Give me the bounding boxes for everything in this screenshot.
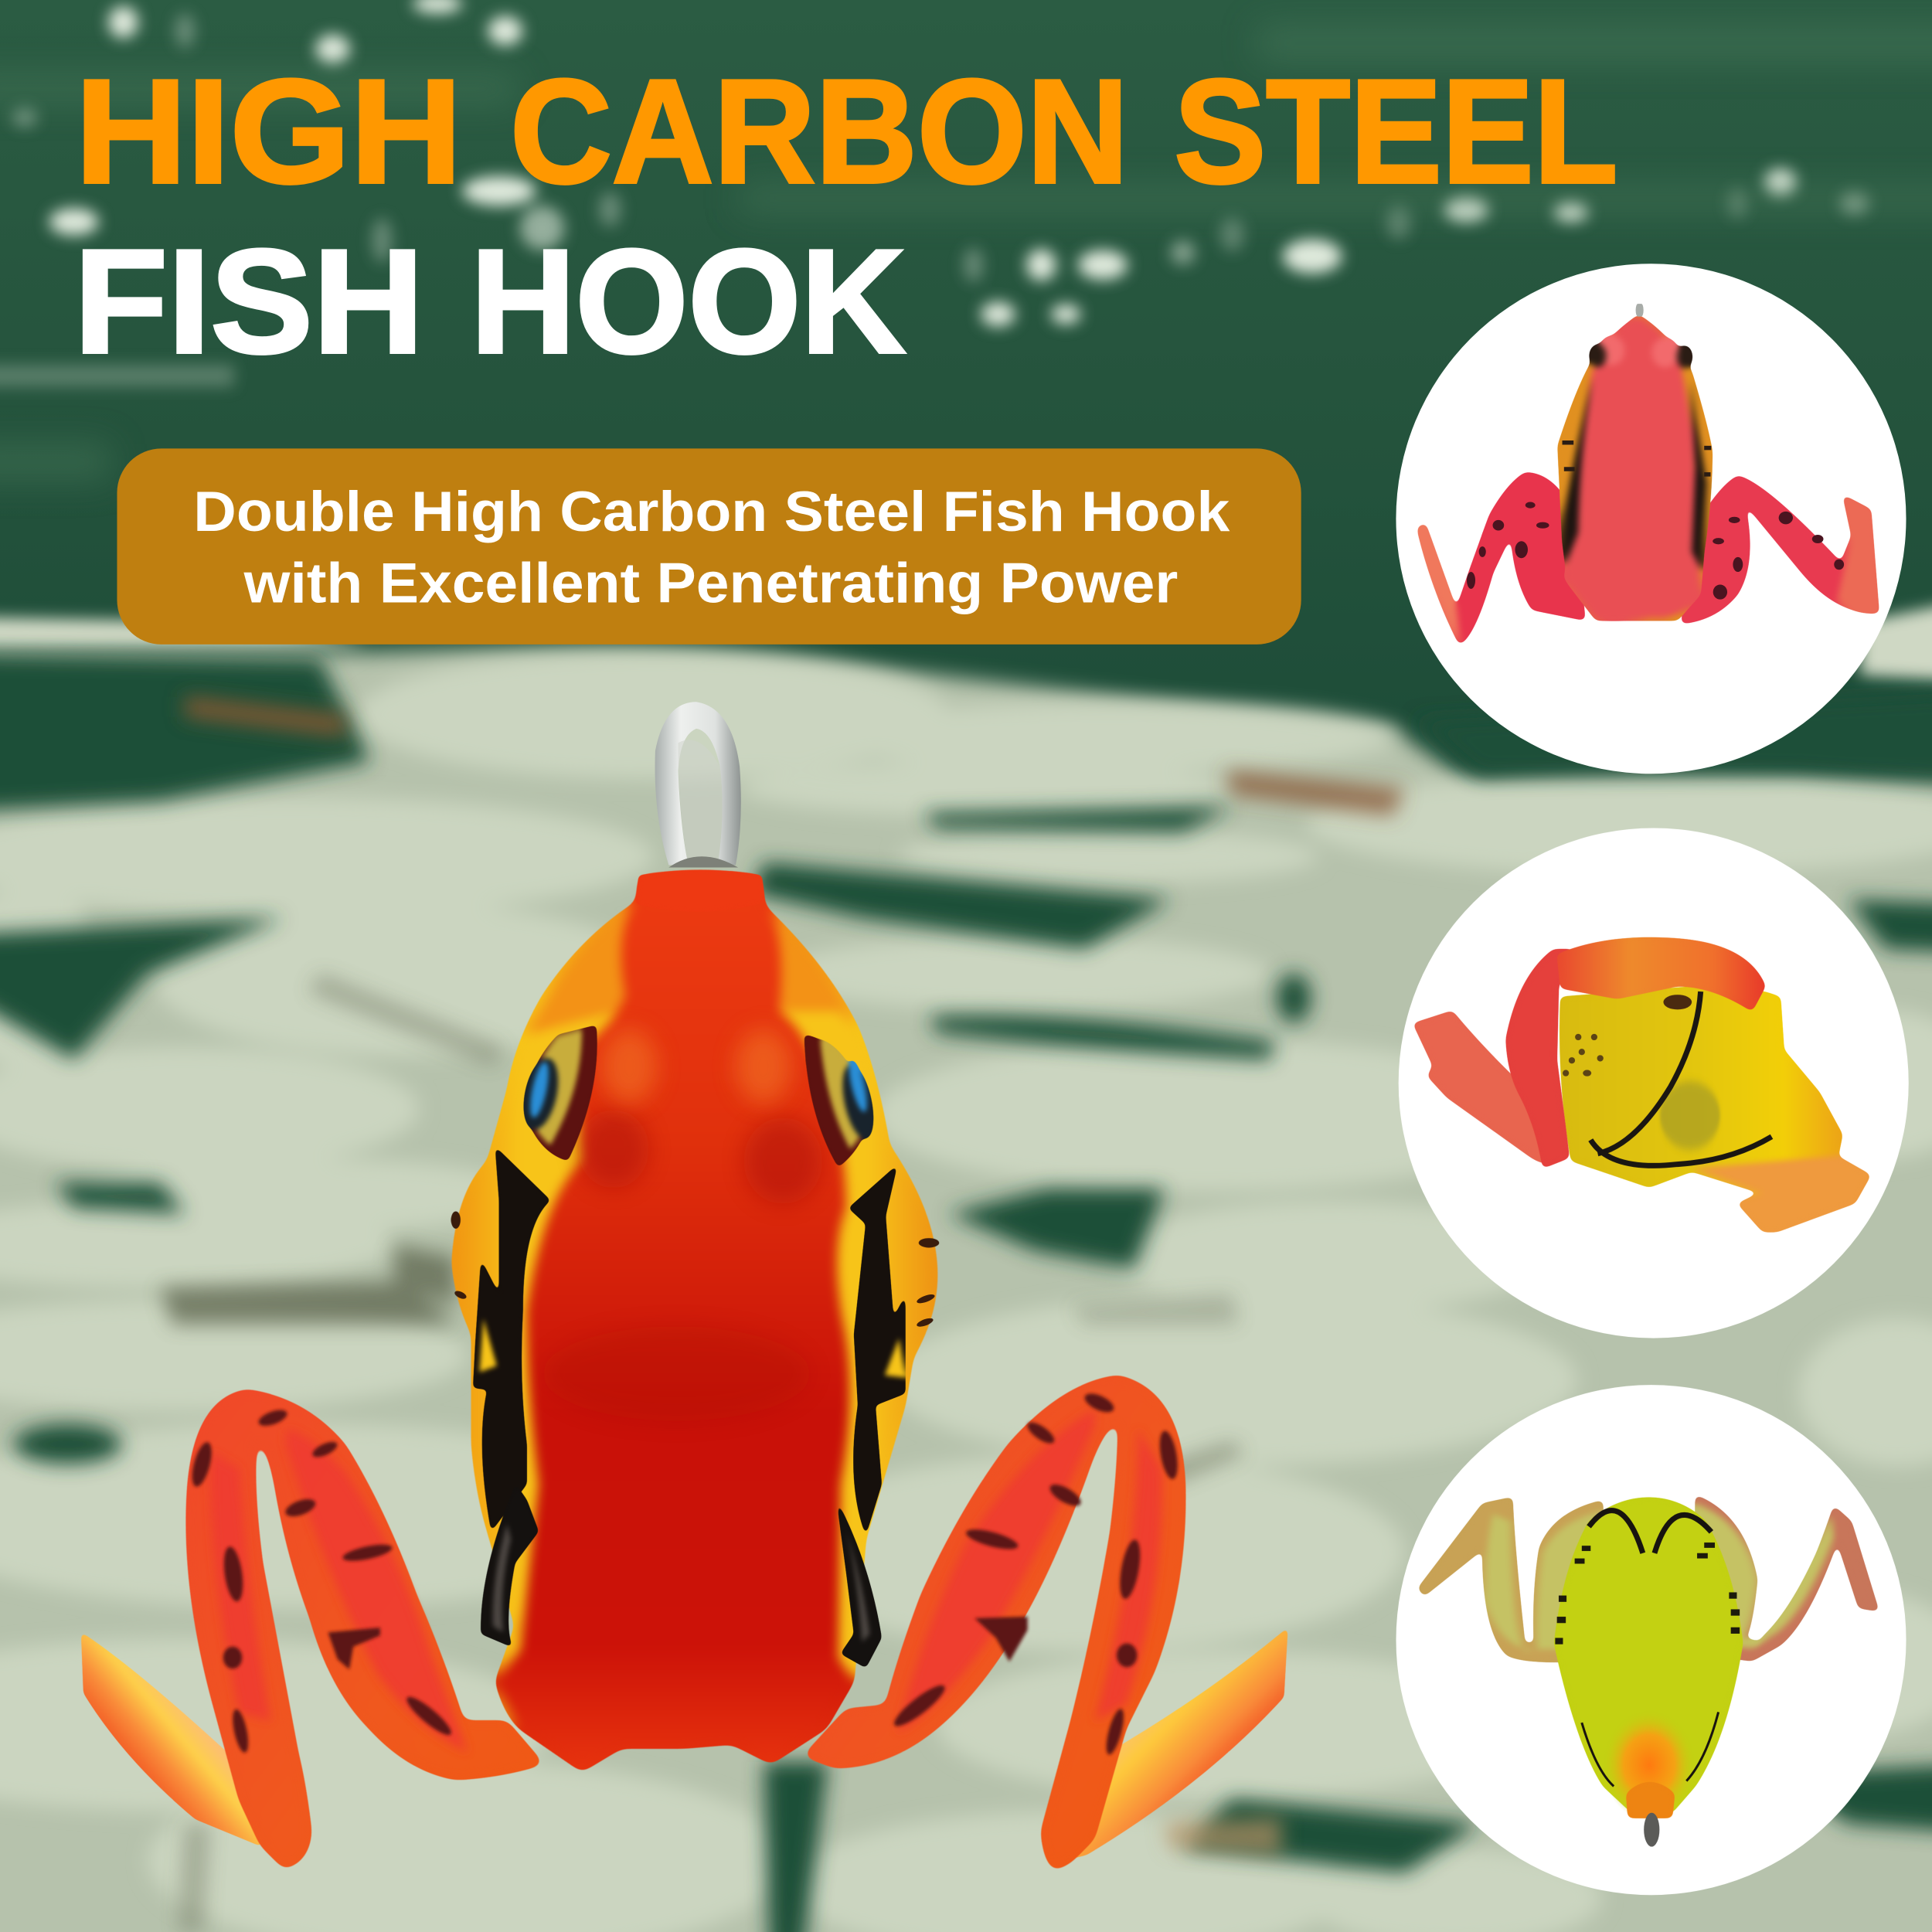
small frog: underside nose xyxy=(1626,1782,1675,1818)
circle: underside view xyxy=(1396,1385,1906,1895)
title line 2 xyxy=(74,219,906,384)
small frog: side view belly patch xyxy=(1660,1082,1720,1149)
small frog: side view body xyxy=(1560,986,1871,1232)
title line 1 xyxy=(75,49,1617,214)
left eye xyxy=(518,1026,597,1161)
small frog: underside hook eye xyxy=(1644,1813,1659,1847)
small frog: top view hook eye xyxy=(1636,304,1644,317)
subtitle line 1: Double High Carbon Steel Fish Hook xyxy=(193,480,1230,543)
title line 1: STEEL xyxy=(1174,49,1617,214)
subtitle line 2: with Excellent Penetrating Power xyxy=(243,552,1178,615)
small frog: underside hooks xyxy=(1582,1511,1719,1786)
flank dashes xyxy=(451,1211,939,1328)
title line 2: HOOK xyxy=(471,219,906,384)
leg spots xyxy=(889,1389,1181,1757)
left hook xyxy=(481,1484,539,1648)
pad base xyxy=(0,647,1932,1932)
right flank stripe xyxy=(849,1165,905,1536)
eyelet ring xyxy=(655,702,741,867)
right hind leg xyxy=(803,1376,1287,1870)
small frog: underside legs xyxy=(1418,1495,1879,1662)
small frog: side view upper leg xyxy=(1557,937,1766,1012)
title line 1: CARBON xyxy=(510,49,1128,214)
frog body xyxy=(451,870,939,1772)
small frog: side view foot xyxy=(1413,1011,1570,1164)
leg spots xyxy=(189,1406,455,1753)
circle: side view xyxy=(1399,828,1909,1338)
left flank stripe xyxy=(473,1147,550,1532)
small frog: top view legs xyxy=(1418,472,1879,645)
small frog: top view body xyxy=(1558,315,1713,621)
left leg red shading xyxy=(211,1429,468,1752)
left hind leg xyxy=(81,1389,544,1869)
small frog: top view leg spots xyxy=(1467,502,1844,600)
right hook xyxy=(837,1500,882,1668)
title line 1: HIGH xyxy=(75,49,462,214)
small frog: underside side spots xyxy=(1555,1543,1740,1645)
main frog lure xyxy=(81,702,1287,1870)
brow shading xyxy=(543,1110,822,1421)
small frog: side view hook xyxy=(1590,992,1771,1165)
small frog: side view lower leg xyxy=(1506,949,1575,1168)
title line 2: FISH xyxy=(74,219,423,384)
right eye xyxy=(804,1035,879,1167)
callout: subtitle pill xyxy=(117,448,1301,645)
small frog: underside body xyxy=(1554,1498,1743,1813)
small frog: top view side dashes xyxy=(1563,440,1711,477)
small frog: side view spots xyxy=(1563,995,1692,1077)
right leg red shading xyxy=(897,1410,1162,1733)
circle: top view xyxy=(1396,264,1906,774)
small frog: underside orange snout xyxy=(1603,1710,1696,1820)
